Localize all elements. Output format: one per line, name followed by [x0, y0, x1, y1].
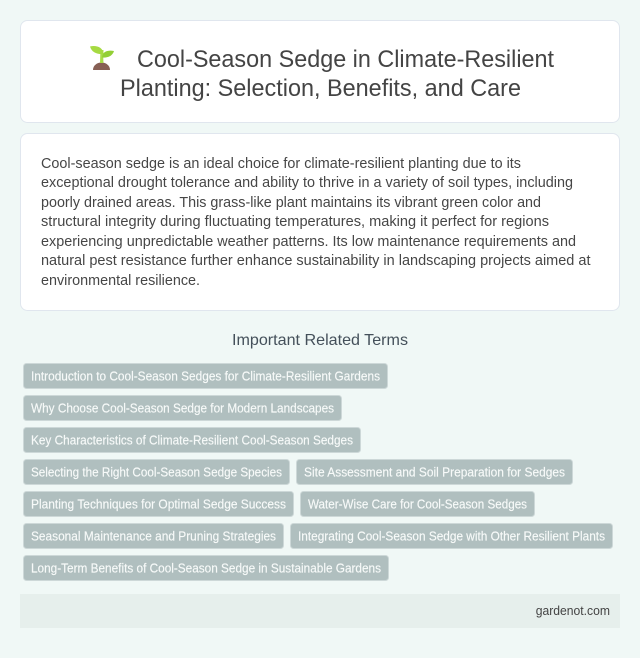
chip: selecting species: Selecting the Right Cool-Season Sedge Species: [31, 466, 282, 480]
chip: why choose: [24, 396, 342, 420]
footer bar: [20, 594, 620, 628]
text block: description: poorly drained areas. This grass-like plant maintains its vibrant green color and: [41, 195, 541, 211]
chip: planting techniques: [24, 492, 294, 516]
chip: integrating: Integrating Cool-Season Sedge with Other Resilient Plants: [298, 530, 605, 544]
heading: related terms: Important Related Terms: [232, 332, 408, 349]
chip: site assessment: Site Assessment and Soil Preparation for Sedges: [304, 466, 565, 480]
chip: planting techniques: Planting Techniques for Optimal Sedge Success: [31, 498, 286, 512]
panel: description card: [20, 134, 620, 310]
footer source text: gardenot.com: [536, 604, 610, 618]
panel: title card: [20, 20, 620, 122]
chip: seasonal maintenance: Seasonal Maintenance and Pruning Strategies: [31, 530, 276, 544]
chip: key characteristics: Key Characteristics of Climate-Resilient Cool-Season Sedges: [31, 434, 353, 448]
chip: site assessment: [296, 460, 572, 484]
text block: description: environmental resilience.: [41, 273, 200, 289]
text block: description: [41, 156, 590, 289]
chip: key characteristics: [24, 428, 360, 452]
text block: description: experiencing unpredictable weather patterns. Its low maintenance requirements and: [41, 234, 576, 250]
chip: water-wise care: [300, 492, 534, 516]
text block: description: natural pest resistance further enhance sustainability in landscaping projects aimed at: [41, 253, 590, 269]
chip group: related terms: [24, 364, 612, 580]
chip: introduction: Introduction to Cool-Season Sedges for Climate-Resilient Gardens: [31, 370, 380, 384]
title: Cool-Season Sedge in Climate-Resilient: [137, 46, 554, 73]
chip: why choose: Why Choose Cool-Season Sedge for Modern Landscapes: [31, 402, 334, 416]
chip: selecting species: [24, 460, 290, 484]
chip: long-term benefits: Long-Term Benefits of Cool-Season Sedge in Sustainable Gardens: [31, 562, 381, 576]
icon: seedling: [90, 46, 114, 70]
chip: long-term benefits: [24, 556, 388, 580]
chip: integrating: [290, 524, 612, 548]
text block: description: Cool-season sedge is an ideal choice for climate-resilient planting due to its: [41, 156, 521, 172]
title: Planting: Selection, Benefits, and Care: [120, 75, 521, 102]
title: [120, 46, 554, 102]
chip: seasonal maintenance: [24, 524, 284, 548]
text block: description: exceptional drought tolerance and ability to thrive in a variety of soil types, including: [41, 175, 573, 191]
chip: water-wise care: Water-Wise Care for Cool-Season Sedges: [308, 498, 527, 512]
chip: introduction: [24, 364, 388, 388]
text block: description: structural integrity during fluctuating temperatures, making it perfect for regions: [41, 214, 549, 230]
